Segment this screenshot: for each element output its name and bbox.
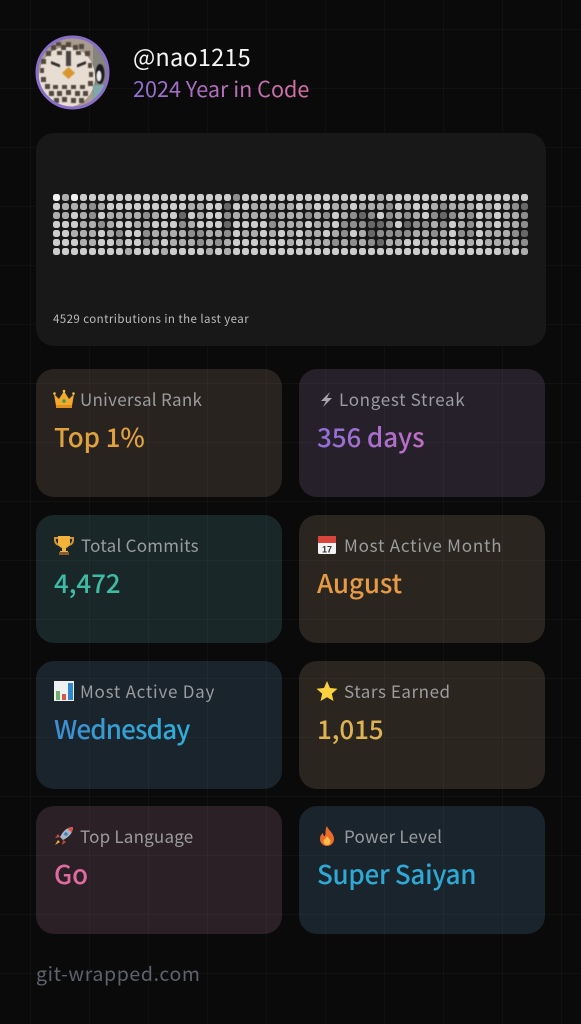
icon: bar chart xyxy=(54,681,74,701)
icon: calendar: 17 xyxy=(322,544,332,554)
label: Total Commits xyxy=(81,532,199,557)
icon: lightning xyxy=(321,392,332,407)
label: Top Language xyxy=(80,823,193,848)
panel: longest streak xyxy=(299,369,545,497)
label: Longest Streak xyxy=(339,386,465,411)
panel: stars earned xyxy=(299,661,545,789)
value: Super Saiyan xyxy=(317,855,476,892)
value: 1,015 xyxy=(317,710,384,747)
panel: top language xyxy=(36,806,282,934)
panel: most active month xyxy=(299,515,545,643)
label: Most Active Day xyxy=(80,678,215,703)
username: @nao1215 xyxy=(133,39,251,73)
contribution heatmap xyxy=(53,194,528,255)
label: Universal Rank xyxy=(80,386,202,411)
icon: fire xyxy=(320,826,334,846)
panel: contribution graph xyxy=(36,133,546,346)
value: Go xyxy=(54,855,88,892)
icon: calendar xyxy=(318,536,336,554)
value: Top 1% xyxy=(54,418,145,455)
value: Wednesday xyxy=(54,710,190,747)
panel: power level xyxy=(299,806,545,934)
panel: universal rank xyxy=(36,369,282,497)
label: Power Level xyxy=(344,823,442,848)
label: Stars Earned xyxy=(344,678,451,703)
icon: trophy xyxy=(54,536,74,555)
contributions caption: 4529 contributions in the last year xyxy=(53,311,249,327)
subtitle: 2024 Year in Code xyxy=(133,73,309,104)
icon: rocket xyxy=(55,827,73,845)
footer site url: git-wrapped.com xyxy=(36,958,201,987)
label: Most Active Month xyxy=(344,532,502,557)
avatar: pixel bead owl xyxy=(36,36,110,110)
icon: crown xyxy=(53,390,75,408)
panel: total commits xyxy=(36,515,282,643)
value: 356 days xyxy=(317,418,424,455)
value: 4,472 xyxy=(54,564,121,601)
panel: most active day xyxy=(36,661,282,789)
icon: star xyxy=(316,681,338,701)
value: August xyxy=(317,564,402,601)
